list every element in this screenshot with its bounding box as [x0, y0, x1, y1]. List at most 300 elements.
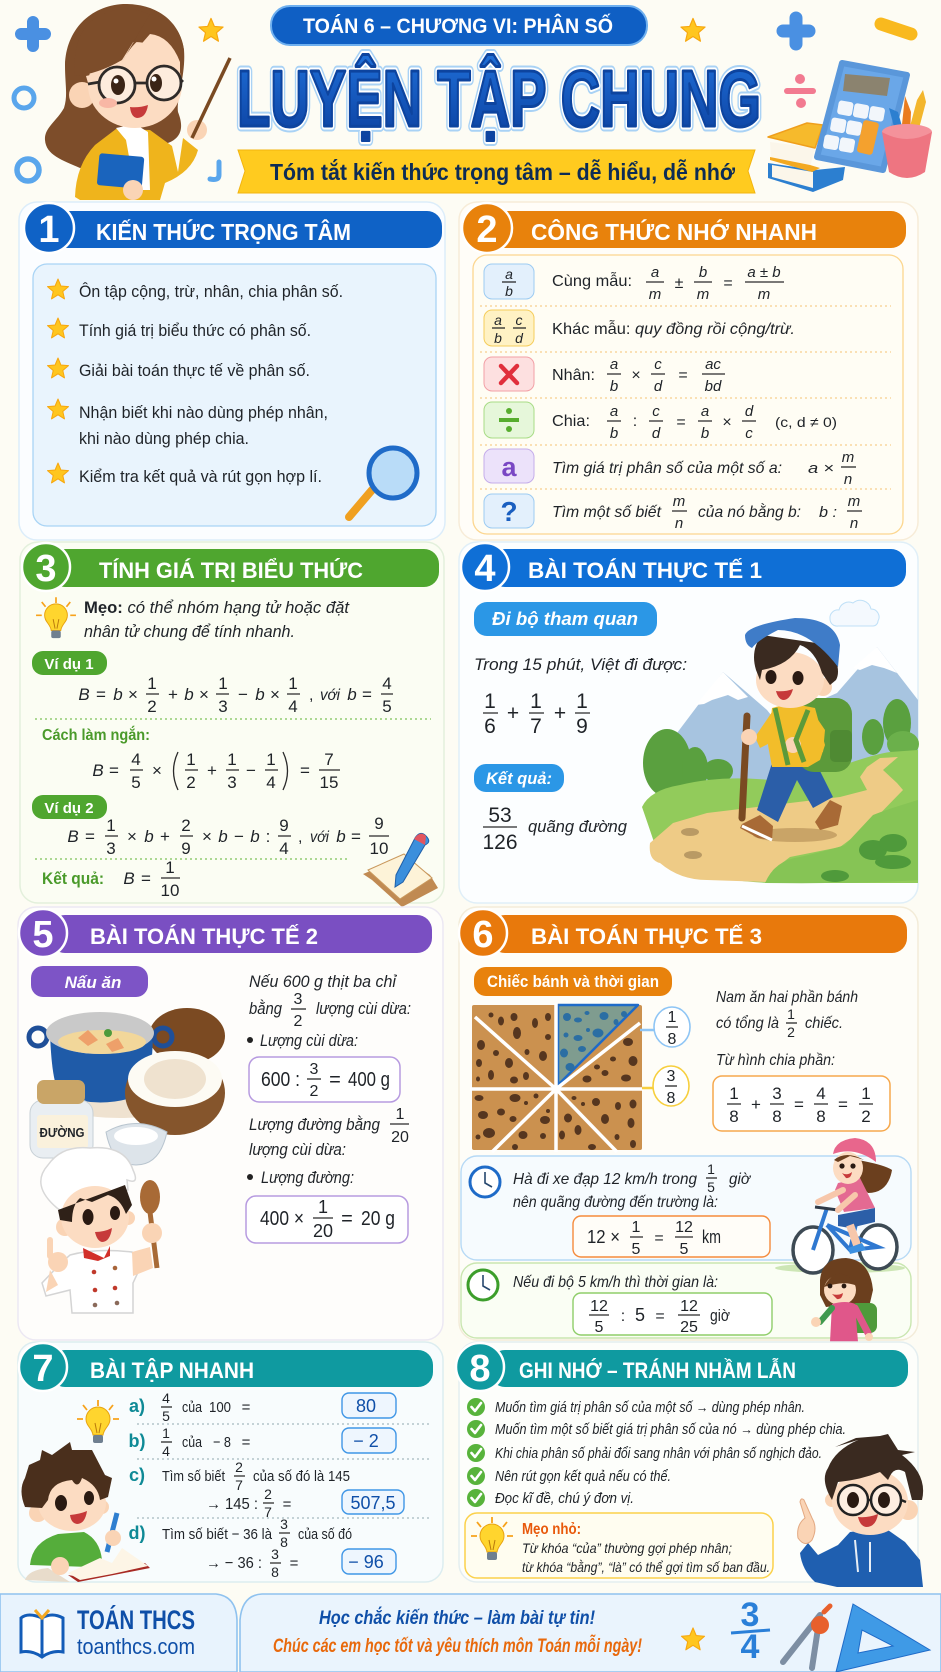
equation: ví dụ 2: 9 [181, 839, 191, 858]
row: cùng mẫu: Cùng mẫu: [552, 271, 632, 290]
equation: quãng đường: 12 × [587, 1227, 620, 1247]
equation: thời gian: 5 [635, 1305, 645, 1325]
heading: 5: BÀI TOÁN THỰC TẾ 2 [90, 924, 318, 949]
box: tổng phân số: 1 [729, 1084, 739, 1103]
row: giá trị phân số: a [501, 452, 517, 482]
row: khác mẫu: Khác mẫu: quy đồng rồi cộng/trừ. [552, 319, 795, 338]
heading: 2: CÔNG THỨC NHỚ NHANH [531, 218, 817, 245]
equation: ví dụ 2: 2 [181, 816, 191, 835]
box: lượng đường: 1 [318, 1197, 328, 1217]
equation: tổng phân số: + [507, 702, 519, 725]
row: tìm một số: n [850, 515, 858, 532]
checklist: Khi chia phân số phải đổi sang nhân với phân số nghịch đảo. [495, 1446, 822, 1462]
result: ví dụ 2: = [141, 869, 151, 888]
heading: 3: TÍNH GIÁ TRỊ BIỂU THỨC [99, 558, 363, 583]
equation: tổng phân số: 1 [530, 690, 542, 713]
row: nhân: ac [705, 356, 721, 373]
equation: ví dụ 1 [78, 674, 393, 716]
row: cùng mẫu: m [697, 286, 709, 303]
row: khác mẫu: a [494, 312, 502, 328]
row: cùng mẫu: m [649, 286, 661, 303]
heading: 1: 1 [38, 209, 60, 251]
exercise a: của [182, 1399, 203, 1416]
heading: 3 [22, 543, 439, 591]
row: chia: × [722, 414, 732, 431]
equation: ví dụ 1: × [128, 685, 138, 704]
heading: 6 [459, 909, 907, 957]
equation: cách làm ngắn: 5 [131, 773, 141, 792]
row: giá trị phân số: n [844, 471, 852, 488]
callout: 1/8 [640, 1007, 690, 1048]
box: lượng đường: 400 × [260, 1208, 304, 1230]
equation: ví dụ 2: b [218, 827, 228, 846]
result: ví dụ 2: 1 [165, 858, 175, 877]
equation: quãng đường: km [702, 1227, 721, 1247]
heading: 7 [19, 1343, 433, 1391]
equation: ví dụ 1: × [199, 685, 209, 704]
equation: ví dụ 1: 4 [382, 674, 392, 693]
panel: 1 kiến thức trọng tâm [19, 202, 445, 540]
text: nam ăn bánh: Từ hình chia phần: [716, 1052, 835, 1069]
row: giá trị phân số: m [842, 449, 854, 466]
exercise a: = [242, 1399, 251, 1416]
row: khác mẫu: c [516, 312, 522, 328]
heading: 4: 4 [474, 548, 496, 590]
exercise b: 1 [162, 1425, 170, 1441]
equation: ví dụ 1: b [184, 685, 194, 704]
equation: ví dụ 1: B [78, 685, 90, 704]
formula table [473, 255, 903, 534]
equation: cách làm ngắn: 4 [266, 773, 276, 792]
row: cùng mẫu: a [651, 264, 659, 281]
exercise d [128, 1516, 396, 1580]
callout: 1/8: 8 [668, 1031, 677, 1048]
checklist: Muốn tìm giá trị phân số của một số → dùng phép nhân. [495, 1400, 805, 1416]
panel: 8 ghi nhớ [456, 1342, 923, 1587]
icon: bulb [77, 1400, 119, 1443]
equation: tổng phân số: 6 [484, 715, 496, 738]
callout: 3/8 [642, 1066, 689, 1107]
equation: tổng phân số: + [554, 702, 566, 725]
row: nhân: Nhân: [552, 367, 595, 384]
heading: 6: BÀI TOÁN THỰC TẾ 3 [531, 924, 762, 949]
equation: ví dụ 2: 1 [106, 816, 116, 835]
answer 80: 80 [356, 1396, 376, 1416]
row: chia: d [745, 403, 754, 420]
row: chia: d [652, 425, 661, 442]
footer [0, 1594, 941, 1672]
panel: 2 công thức nhớ nhanh [459, 202, 918, 540]
list box: Giải bài toán thực tế về phân số. [79, 361, 310, 380]
panel: 3 tính giá trị biểu thức [20, 542, 444, 907]
row: chia: c [652, 403, 660, 420]
row: khác mẫu: d [515, 330, 524, 346]
equation: ví dụ 1: + [168, 685, 178, 704]
icon: open book logo [21, 1610, 63, 1657]
equation: ví dụ 2: + [160, 827, 170, 846]
equation: ví dụ 1: = [96, 685, 106, 704]
equation: ví dụ 2: 9 [374, 814, 384, 833]
equation: cách làm ngắn: 1 [227, 750, 237, 769]
row: cùng mẫu: a [505, 266, 513, 282]
label: đi bộ tham quan [474, 602, 657, 636]
text: đề bài và lời giải: lượng cùi dừa: [249, 1140, 346, 1159]
equation: cách làm ngắn: 1 [186, 750, 196, 769]
row: tìm một số: b : [819, 504, 837, 521]
equation: cách làm ngắn: × [152, 761, 162, 780]
row: cùng mẫu [484, 264, 784, 303]
equation: cách làm ngắn: 7 [324, 750, 334, 769]
equation: ví dụ 2: 3 [106, 839, 116, 858]
exercise a [129, 1390, 396, 1424]
heading: 4 [461, 543, 906, 591]
equation: ví dụ 2: b [144, 827, 154, 846]
exercise c: 2 [264, 1486, 272, 1502]
equation: ví dụ 2: b [336, 827, 346, 846]
equation: tổng phân số: 1 [484, 690, 496, 713]
exercise d: của số đó [298, 1526, 352, 1543]
equation: thời gian [573, 1293, 772, 1336]
exercise d: 8 [271, 1564, 279, 1580]
callout: 3/8: 8 [667, 1090, 676, 1107]
label: ví dụ 2 [32, 795, 107, 819]
box: tổng phân số: = [838, 1095, 848, 1114]
box: lượng cùi dừa: = [329, 1069, 341, 1091]
equation: cách làm ngắn: 15 [320, 773, 338, 792]
exercise a: a) [129, 1396, 145, 1416]
heading pill [271, 6, 647, 45]
row: cùng mẫu: m [758, 286, 770, 303]
row: tìm một số [484, 493, 862, 532]
result: 53/126 [482, 804, 628, 854]
box: đi xe đạp: 5 [707, 1179, 715, 1195]
equation: cách làm ngắn [92, 750, 340, 792]
equation: thời gian: 5 [595, 1319, 604, 1336]
equation: tổng phân số [483, 690, 590, 738]
list box: khi nào dùng phép chia. [79, 429, 249, 448]
exercise c: 7 [264, 1504, 272, 1520]
exercise b: của [182, 1434, 203, 1451]
equation: ví dụ 1: − [238, 685, 248, 704]
heading: 8: GHI NHỚ – TRÁNH NHẦM LẪN [519, 1357, 796, 1383]
equation: ví dụ 2 [67, 814, 389, 858]
equation: ví dụ 1: b [347, 685, 357, 704]
footer: logo panel [0, 1594, 237, 1672]
fraction 3/4: 4 [741, 1628, 760, 1666]
footer: message panel: Chúc các em học tốt và yêu thích môn Toán mỗi ngày! [273, 1635, 642, 1657]
equation: ví dụ 2: × [202, 827, 212, 846]
label: cách làm ngắn: Cách làm ngắn: [42, 725, 150, 744]
heading: 8: 8 [469, 1348, 491, 1390]
row: khác mẫu: b [494, 330, 502, 346]
label: ví dụ 2: Ví dụ 2 [44, 800, 94, 817]
illustration: walking girl [811, 1258, 877, 1342]
box: lượng đường: 20 g [361, 1208, 395, 1230]
text: đề bài và lời giải: bằng [249, 999, 282, 1018]
row: chia: (c, d ≠ 0) [775, 414, 837, 430]
row: giá trị phân số: a × [808, 460, 834, 477]
box: đi xe đạp: 1 [707, 1161, 715, 1177]
heading: 3: 3 [35, 548, 57, 590]
equation: ví dụ 1: 1 [147, 674, 157, 693]
answer -2 [342, 1428, 396, 1453]
tip with bulb [36, 597, 350, 641]
text: nam ăn bánh [716, 989, 858, 1069]
callout: 3/8: 3 [667, 1068, 676, 1085]
box: đi xe đạp [461, 1156, 911, 1260]
equation: thời gian: giờ [710, 1306, 730, 1325]
box: lượng cùi dừa: 3 [310, 1061, 319, 1078]
tip with bulb: Mẹo: có thể nhóm hạng tử hoặc đặt [84, 599, 350, 617]
exercise c: 2 [235, 1459, 243, 1475]
equation: quãng đường: 5 [632, 1241, 641, 1258]
list box: Nhận biết khi nào dùng phép nhân, [79, 403, 328, 422]
row: nhân: d [654, 378, 663, 395]
equation: cách làm ngắn: B [92, 761, 104, 780]
heading: 5 [19, 909, 432, 957]
box: tổng phân số [713, 1076, 890, 1131]
equation: cách làm ngắn: − [246, 761, 256, 780]
box: đi bộ [461, 1263, 911, 1338]
equation: ví dụ 2: , [298, 829, 302, 846]
illustration: girl riding a bike [775, 1138, 905, 1273]
list box: Kiểm tra kết quả và rút gọn hợp lí. [79, 467, 322, 486]
answer -2: − 2 [353, 1431, 379, 1451]
row: khác mẫu [484, 310, 795, 346]
text: đề bài và lời giải: Lượng đường: [261, 1168, 354, 1187]
row: tìm một số: của nó bằng b: [698, 502, 801, 521]
box: lượng đường: = [341, 1208, 353, 1230]
equation: ví dụ 1: , [309, 687, 313, 704]
box: đi xe đạp: Hà đi xe đạp 12 km/h trong [513, 1171, 697, 1188]
checklist: Nên rút gọn kết quả nếu có thể. [495, 1469, 671, 1485]
equation: quãng đường: = [654, 1230, 664, 1247]
row: cùng mẫu: a ± b [747, 264, 781, 281]
result: 53/126: 126 [482, 831, 518, 854]
equation: cách làm ngắn: 3 [227, 773, 237, 792]
text: đề bài và lời giải: 3 [294, 991, 303, 1008]
row: cùng mẫu: b [505, 283, 513, 299]
illustration: pot, coconut, sugar jar: ĐƯỜNG [40, 1125, 84, 1140]
box: tổng phân số: 3 [772, 1084, 782, 1103]
equation: tổng phân số: 7 [530, 715, 542, 738]
box: tổng phân số: 8 [772, 1107, 782, 1126]
list box: Tính giá trị biểu thức có phân số. [79, 321, 311, 340]
row: chia: Chia: [552, 413, 590, 430]
panel: 6 bài toán thực tế 3 [459, 907, 918, 1342]
exercise c: → 145 : [206, 1496, 258, 1513]
exercise d: → − 36 : [206, 1555, 262, 1572]
footer: message panel: Học chắc kiến thức – làm bài tự tin! [319, 1607, 595, 1629]
equation: ví dụ 1: b [113, 685, 123, 704]
equation: ví dụ 1: 5 [382, 697, 392, 716]
box: tổng phân số: 8 [816, 1107, 826, 1126]
exercise a: 100 [209, 1399, 231, 1416]
equation: ví dụ 2: 9 [279, 816, 289, 835]
equation: thời gian: : [621, 1308, 625, 1325]
row: chia: b [610, 425, 618, 442]
subtitle ribbon [238, 150, 755, 193]
icon: compass [783, 1606, 830, 1668]
heading: 1: KIẾN THỨC TRỌNG TÂM [96, 218, 351, 245]
equation: ví dụ 1: b [255, 685, 265, 704]
exercise c: 7 [235, 1477, 243, 1493]
row: tìm một số: m [848, 493, 860, 510]
equation: ví dụ 2: 10 [370, 839, 388, 858]
label: đi bộ tham quan: Đi bộ tham quan [492, 609, 638, 629]
illustration: boy with glasses [798, 1434, 923, 1587]
row: chia: = [676, 414, 686, 431]
equation: cách làm ngắn: 4 [131, 750, 141, 769]
fraction 3/4: 3 [741, 1596, 759, 1634]
heading: 5: 5 [32, 914, 54, 956]
equation: cách làm ngắn: + [207, 761, 217, 780]
equation: ví dụ 1: 2 [147, 697, 157, 716]
text: nam ăn bánh: có tổng là [716, 1014, 779, 1032]
equation: ví dụ 2: = [351, 827, 361, 846]
row: cùng mẫu: b [699, 264, 707, 281]
answer 80 [342, 1393, 396, 1418]
list box [33, 264, 436, 526]
equation: cách làm ngắn: 1 [266, 750, 276, 769]
checklist [467, 1398, 846, 1507]
exercise d: 3 [280, 1516, 288, 1532]
box: lượng đường: 20 [313, 1221, 333, 1241]
exercise d: = [290, 1555, 299, 1572]
exercise d: Tìm số biết − 36 là [162, 1526, 273, 1543]
equation: ví dụ 1: 1 [218, 674, 228, 693]
label: nấu ăn [31, 966, 148, 997]
list box: Ôn tập cộng, trừ, nhân, chia phân số. [79, 282, 343, 301]
panel: 7 bài tập nhanh [18, 1342, 443, 1582]
text: nam ăn bánh: chiếc. [805, 1015, 843, 1032]
icon: magnifier [349, 448, 417, 517]
icon: set square [836, 1604, 930, 1672]
equation: thời gian: = [655, 1308, 665, 1325]
exercise b: b) [128, 1431, 146, 1451]
illustration: pot, coconut, sugar jar [29, 1008, 225, 1165]
fraction 3/4 [731, 1596, 770, 1666]
text: đề bài và lời giải: Nếu 600 g thịt ba chỉ [249, 972, 397, 991]
equation: cách làm ngắn: 2 [186, 773, 196, 792]
text: đề bài và lời giải: lượng cùi dừa: [316, 999, 411, 1018]
result: 53/126: quãng đường [528, 817, 628, 836]
row: chia: a [610, 403, 618, 420]
equation: ví dụ 1: 3 [218, 697, 228, 716]
equation: ví dụ 2: × [127, 827, 137, 846]
result: ví dụ 2: Kết quả: [42, 869, 104, 888]
heading: 4: BÀI TOÁN THỰC TẾ 1 [528, 558, 762, 583]
heading: 7: BÀI TẬP NHANH [90, 1358, 254, 1383]
exercise c: c) [129, 1465, 145, 1485]
equation: ví dụ 2: b [250, 827, 260, 846]
text: đề bài và lời giải: Lượng cùi dừa: [260, 1031, 358, 1050]
tip box: Mẹo nhỏ: [522, 1521, 581, 1538]
equation: cách làm ngắn: = [300, 761, 310, 780]
panel: 4 bài toán thực tế 1 [459, 542, 919, 903]
answer -96: − 96 [348, 1552, 384, 1572]
illustration: hiking scene [642, 600, 919, 883]
answer -96 [342, 1549, 396, 1574]
text: nam ăn bánh: Nam ăn hai phần bánh [716, 989, 858, 1006]
illustration: chef boy [41, 1148, 162, 1313]
icon: green clock [468, 1270, 498, 1300]
equation: tổng phân số: 9 [576, 715, 588, 738]
box: tổng phân số: 4 [816, 1084, 826, 1103]
icon: star [681, 1628, 705, 1650]
equation: ví dụ 2: − [234, 827, 244, 846]
heading: 1 [24, 203, 442, 253]
text: nam ăn bánh: 1 [787, 1006, 795, 1022]
tip with bulb: nhân tử chung để tính nhanh. [84, 623, 295, 641]
checklist: Muốn tìm một số biết giá trị phân số của nó → dùng phép chia. [495, 1422, 846, 1438]
footer: message panel [240, 1594, 941, 1672]
text: nam ăn bánh: 2 [787, 1024, 795, 1040]
row: chia: b [701, 425, 709, 442]
equation: quãng đường [573, 1216, 770, 1258]
result: ví dụ 2: 10 [161, 881, 179, 900]
equation: ví dụ 1: với [320, 687, 340, 704]
answer 507,5: 507,5 [350, 1493, 396, 1513]
label: chiếc bánh và thời gian [474, 967, 672, 996]
result: ví dụ 2: B [123, 869, 135, 888]
exercise c [129, 1459, 404, 1520]
box: tổng phân số: + [751, 1095, 761, 1114]
icon: decorative maths symbols [14, 18, 911, 181]
row: chia: : [633, 413, 637, 430]
label: nấu ăn: Nấu ăn [65, 973, 121, 992]
box: tổng phân số: 2 [861, 1107, 871, 1126]
row: cùng mẫu: = [723, 275, 733, 292]
equation: ví dụ 2: = [85, 827, 95, 846]
label: ví dụ 1: Ví dụ 1 [44, 656, 94, 673]
equation: ví dụ 2: B [67, 827, 79, 846]
box: lượng cùi dừa: 600 : [261, 1069, 300, 1091]
equation: quãng đường: 12 [675, 1219, 693, 1236]
text: đề bài và lời giải: Lượng đường bằng [249, 1115, 380, 1134]
heading: 6: 6 [472, 914, 494, 956]
row: chia: a [701, 403, 709, 420]
equation: ví dụ 2: với [310, 829, 329, 846]
exercise d: 8 [280, 1534, 288, 1550]
tip box: Từ khóa “của” thường gợi phép nhân; [522, 1540, 732, 1556]
equation: thời gian: 12 [680, 1298, 698, 1315]
row: cùng mẫu: ± [675, 275, 684, 292]
box: đi bộ: Nếu đi bộ 5 km/h thì thời gian là: [513, 1274, 718, 1291]
row: giá trị phân số [484, 449, 856, 488]
exercise c: Tìm số biết [162, 1468, 226, 1485]
row: nhân: b [610, 378, 618, 395]
box: đi xe đạp: giờ [729, 1171, 751, 1188]
exercise b: 4 [162, 1443, 170, 1459]
equation: thời gian: 25 [680, 1319, 698, 1336]
label: kết quả: Kết quả: [486, 769, 552, 788]
footer: logo panel: toanthcs.com [77, 1634, 195, 1659]
result: ví dụ 2 [42, 858, 180, 900]
equation: ví dụ 2: : [266, 827, 270, 846]
exercise c: = [283, 1496, 292, 1513]
heading: 8 [456, 1343, 908, 1391]
answer 507,5 [342, 1490, 404, 1514]
exercise b: − 8 [213, 1434, 231, 1451]
equation: ví dụ 1: 4 [288, 697, 298, 716]
exercise b: = [242, 1434, 251, 1451]
row: nhân: c [654, 356, 662, 373]
row: chia: c [745, 425, 753, 442]
exercise a: 5 [162, 1408, 170, 1424]
text: đề bài và lời giải: 2 [294, 1013, 303, 1030]
row: giá trị phân số: Tìm giá trị phân số của một số a: [552, 460, 782, 477]
